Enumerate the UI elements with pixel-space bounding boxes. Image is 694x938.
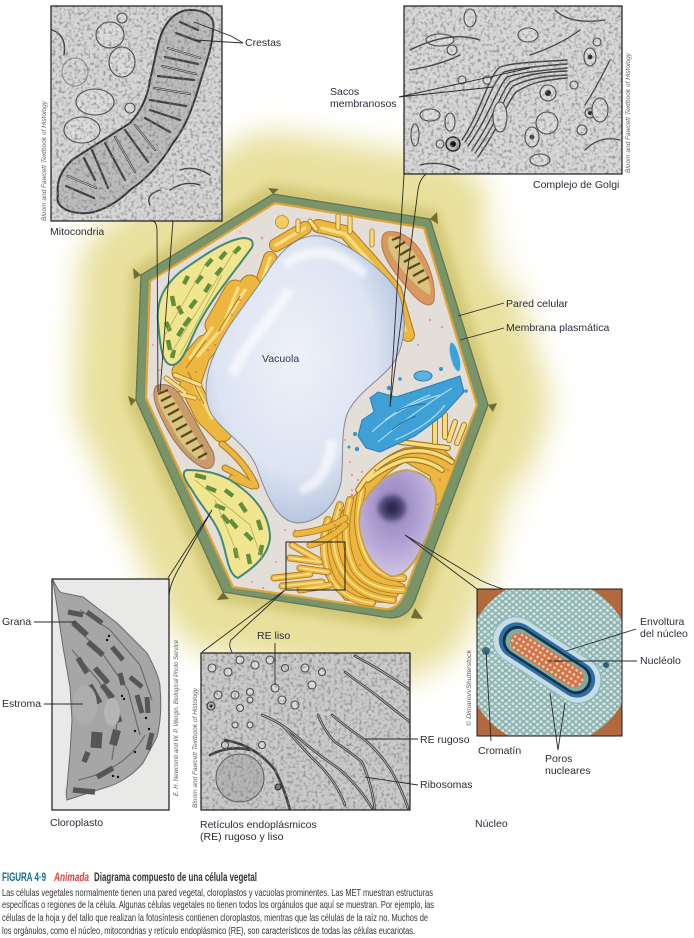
endoplasmic reticulum: around nucleus and bottom [274,415,464,603]
label: Pared celular [458,298,568,316]
label: Retículos endoplásmicos: Retículos endoplásmicos [200,819,317,831]
label: Retículos endoplásmicos: (RE) rugoso y liso [200,831,284,843]
label: RE liso: RE liso [257,630,290,642]
label: Cloroplasto: Cloroplasto [50,817,103,829]
label: Poros nucleares: nucleares [545,765,591,777]
photo credits: Bloom and Fawcett Textbook of Histology [625,52,632,173]
figure caption [2,870,434,937]
photo credits: Bloom and Fawcett Textbook of Histology [41,100,48,221]
label: Retículos endoplásmicos [200,819,317,843]
label: RE liso [257,630,290,685]
chloroplast, upper [158,238,253,365]
mitochondrion, upper right [382,232,434,305]
label: Sacos membranosos: membranosos [330,98,397,110]
micrograph: Golgi [404,6,622,174]
vacuole [206,236,404,523]
caption body: específicas o regiones de la célula. Algunas células vegetales no tienen todos los orgánulos que aquí se muestran. Por ejemplo, las [2,900,434,911]
label: Pared celular: Pared celular [506,298,568,310]
label: Ribosomas: Ribosomas [420,779,473,791]
nucleus [359,470,436,576]
caption heading [2,870,257,884]
connector lines [152,173,503,652]
micrograph: chloroplast [52,579,169,810]
label: Sacos membranosos: Sacos [330,86,359,98]
label: Grana: Grana [2,616,31,628]
micrograph: mitochondria [51,6,222,221]
cell wall [136,194,488,618]
label: Poros nucleares [545,693,591,777]
caption body: Las células vegetales normalmente tienen una pared vegetal, cloroplastos y vacuolas prominentes. Las MET muestran estructuras [2,888,433,899]
plasma membrane and cytoplasm [146,203,477,609]
neighbouring cells background [128,188,553,619]
caption heading: Diagrama compuesto de una célula vegetal [94,870,257,884]
label: Complejo de Golgi: Complejo de Golgi [533,179,619,191]
label: Núcleo: Núcleo [475,818,508,830]
photo credits: Bloom and Fawcett Textbook of Histology [192,687,199,808]
endoplasmic reticulum: left [166,285,256,486]
photo credits: E. H. Newcomb and W. P. Wergin, Biological Photo Service [173,640,180,796]
label: Ribosomas [365,777,473,791]
label: Envoltura del núcleo: del núcleo [640,628,688,640]
label: Cromatín [478,651,521,757]
label: Membrana plasmática: Membrana plasmática [506,322,609,334]
caption heading: Animada [53,870,89,884]
label: Poros nucleares: Poros [545,753,572,765]
label: Grana [2,616,75,628]
caption heading: FIGURA 4·9 [2,870,46,884]
endoplasmic reticulum: top [262,216,408,335]
Golgi complex [348,341,468,452]
label: Envoltura del núcleo: Envoltura [640,616,685,628]
photo credits [41,52,632,808]
caption body: los orgánulos, como el núcleo, mitocondrias y retículo endoplásmico (RE), son característicos de todas las células eucariotas. [2,926,415,937]
label: Crestas: Crestas [245,37,281,49]
label: Nucléolo [548,655,681,667]
ribosome dots [152,231,451,589]
label: Envoltura del núcleo [566,616,688,651]
caption body [2,888,434,937]
label: Estroma: Estroma [2,698,41,710]
chloroplast, lower [184,470,270,578]
photo credits: © Dimarion/Shutterstock [465,649,473,726]
label: Membrana plasmática [460,322,609,340]
label: Nucléolo: Nucléolo [640,655,681,667]
label: Estroma [2,698,83,710]
micrograph: endoplasmic reticulum [201,653,410,810]
caption body: células de la hoja y del tallo que realizan la fotosíntesis contienen cloroplastos, mientras que las células de la raíz no. Muchos de [2,913,428,924]
label: RE rugoso [365,734,470,746]
label: Vacuola: Vacuola [262,353,299,365]
plant cell diagram [136,194,488,618]
mitochondrion, left [154,384,214,468]
vesicles [96,22,124,48]
label: RE rugoso: RE rugoso [420,734,470,746]
micrograph: nucleus [476,588,622,736]
label: Sacos membranosos [330,68,530,110]
mitochondrion body [57,10,213,213]
label: Cromatín: Cromatín [478,745,521,757]
label: Mitocondria: Mitocondria [50,226,104,238]
label: Crestas [194,22,281,49]
